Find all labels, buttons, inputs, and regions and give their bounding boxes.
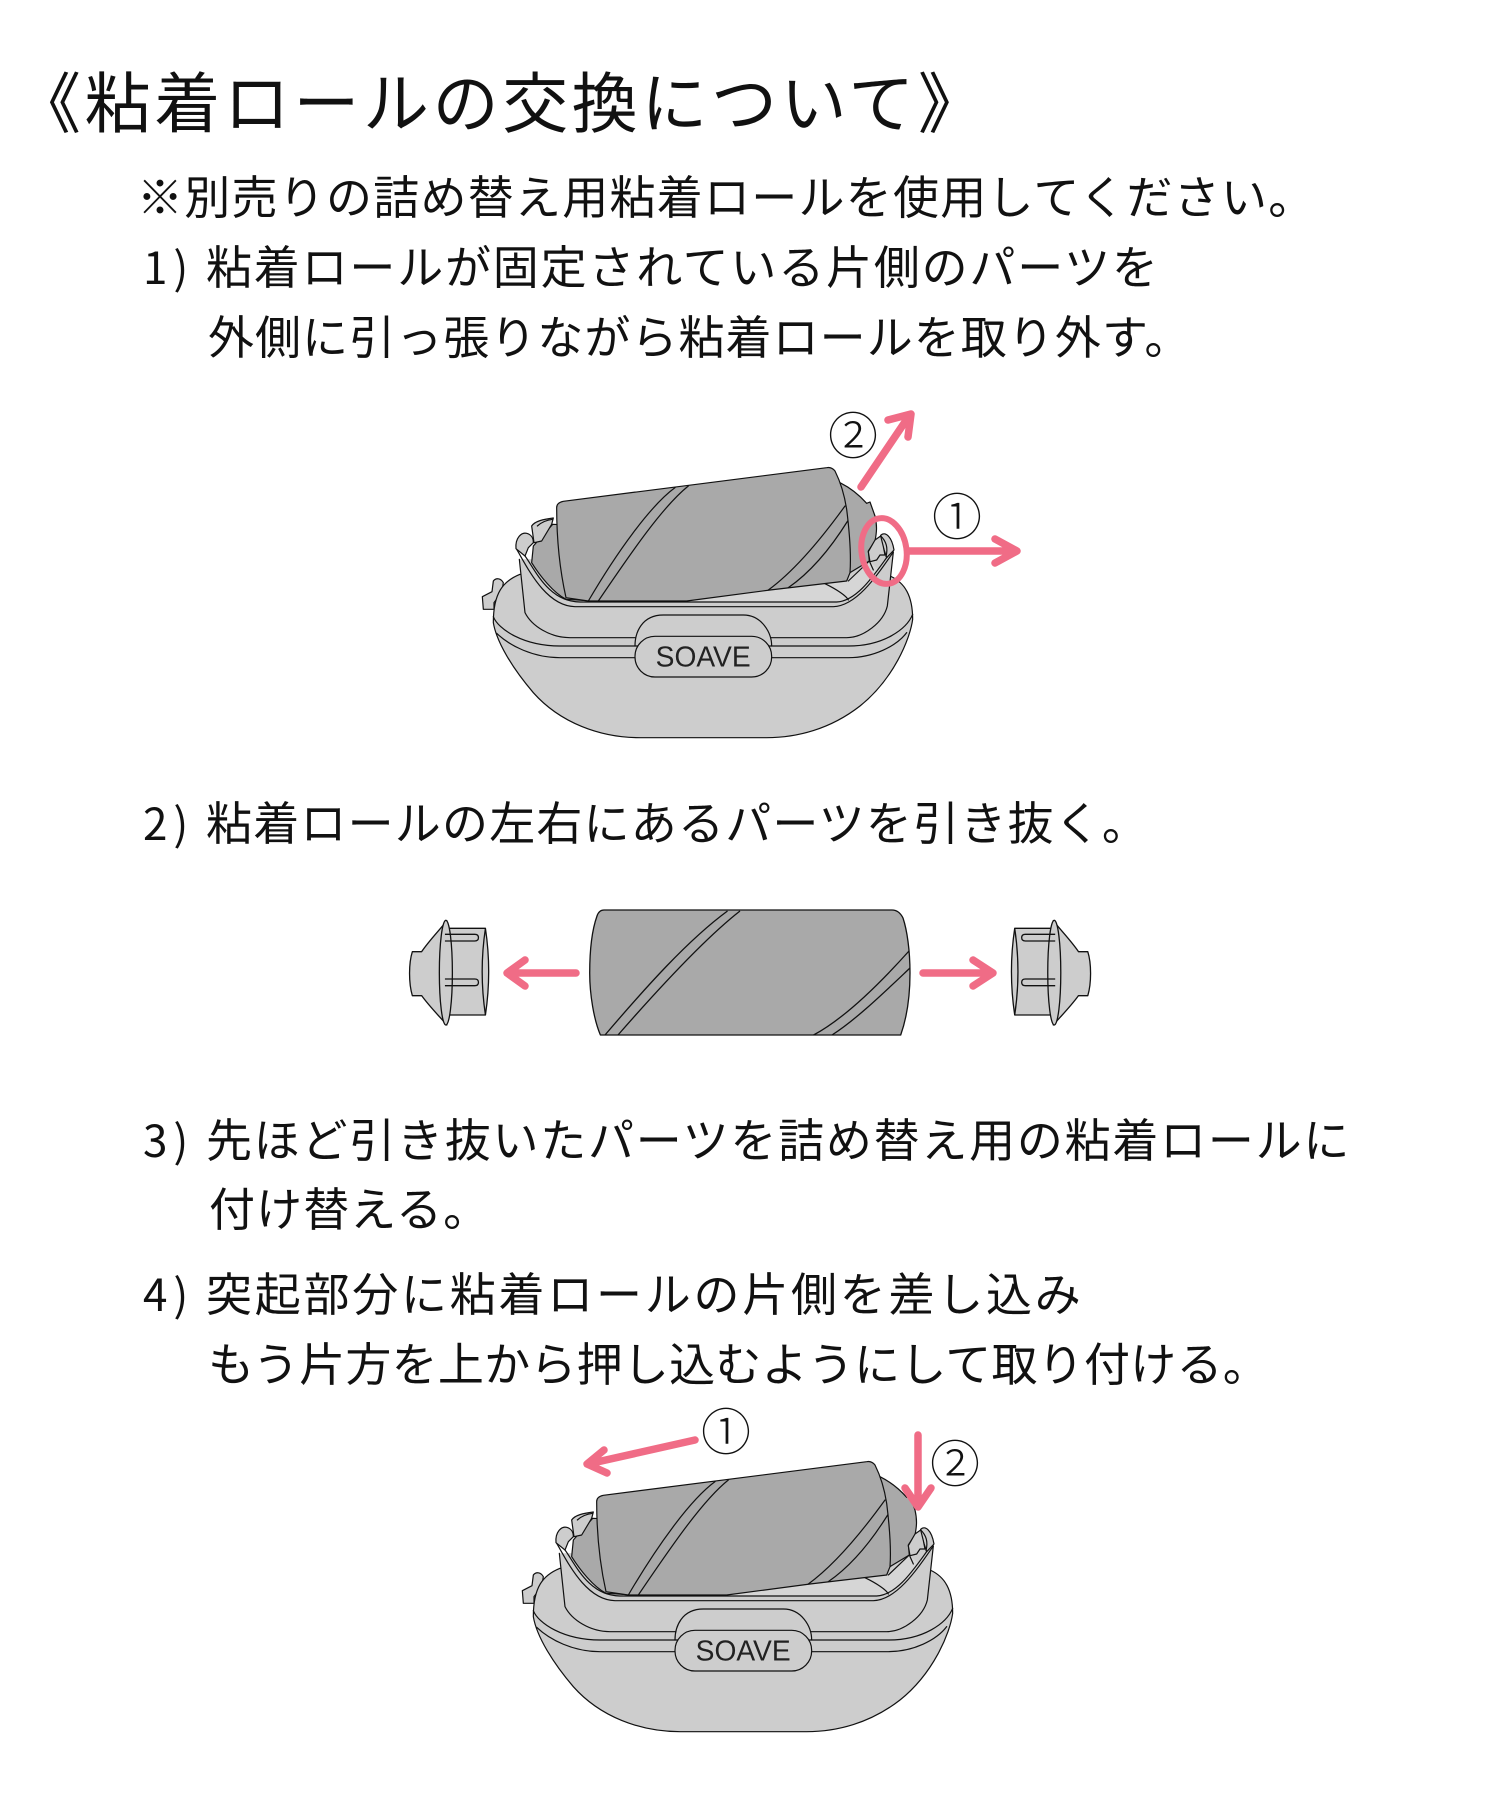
case illustration: SOAVE bbox=[696, 1636, 791, 1668]
step 1 text: 粘着ロールが固定されている片側のパーツを bbox=[206, 242, 1160, 294]
right end part bbox=[1011, 920, 1091, 1025]
case illustration: SOAVE bbox=[656, 642, 751, 674]
number 2: ② bbox=[930, 1425, 980, 1497]
step 3 text bbox=[143, 1106, 1351, 1236]
number 1: ① bbox=[932, 478, 982, 550]
step 2 text: 粘着ロールの左右にあるパーツを引き抜く。 bbox=[206, 798, 1149, 850]
step 4 text: 4) bbox=[143, 1260, 194, 1324]
diagram: roll with both end parts pulled out bbox=[410, 910, 1091, 1035]
title: 《粘着ロールの交換について》 bbox=[15, 67, 987, 141]
diagram: removing the roll from the case bbox=[482, 397, 1017, 738]
arrow: left bbox=[507, 960, 576, 986]
case illustration bbox=[522, 1461, 953, 1732]
arrow 1: push left bbox=[587, 1440, 695, 1473]
highlight ring bbox=[857, 515, 911, 587]
left end part bbox=[410, 920, 489, 1025]
arrow 1: outward bbox=[908, 539, 1017, 563]
number 2: ② bbox=[828, 397, 878, 469]
step 3 text: 先ほど引き抜いたパーツを詰め替え用の粘着ロールに bbox=[206, 1115, 1351, 1167]
arrow 2: press down bbox=[905, 1435, 931, 1507]
number 1: ① bbox=[701, 1393, 751, 1465]
step 4 text: もう片方を上から押し込むようにして取り付ける。 bbox=[208, 1339, 1269, 1391]
step 4 text bbox=[143, 1260, 1269, 1391]
step 2 text: 2) bbox=[143, 789, 194, 853]
diagram: reattaching the roll bbox=[522, 1393, 980, 1732]
step 1 text: 外側に引っ張りながら粘着ロールを取り外す。 bbox=[208, 312, 1191, 364]
step 4 text: 突起部分に粘着ロールの片側を差し込み bbox=[206, 1269, 1084, 1321]
arrow: right bbox=[923, 960, 993, 986]
case illustration bbox=[482, 467, 913, 738]
step 1 text: 1) bbox=[143, 233, 194, 297]
step 1 text bbox=[143, 233, 1191, 364]
note: refill roll: ※別売りの詰め替え用粘着ロールを使用してください。 bbox=[137, 172, 1316, 224]
step 3 text: 3) bbox=[143, 1106, 194, 1170]
step 3 text: 付け替える。 bbox=[209, 1184, 490, 1236]
arrow 2: up and out bbox=[861, 414, 911, 487]
roll bbox=[590, 910, 910, 1035]
